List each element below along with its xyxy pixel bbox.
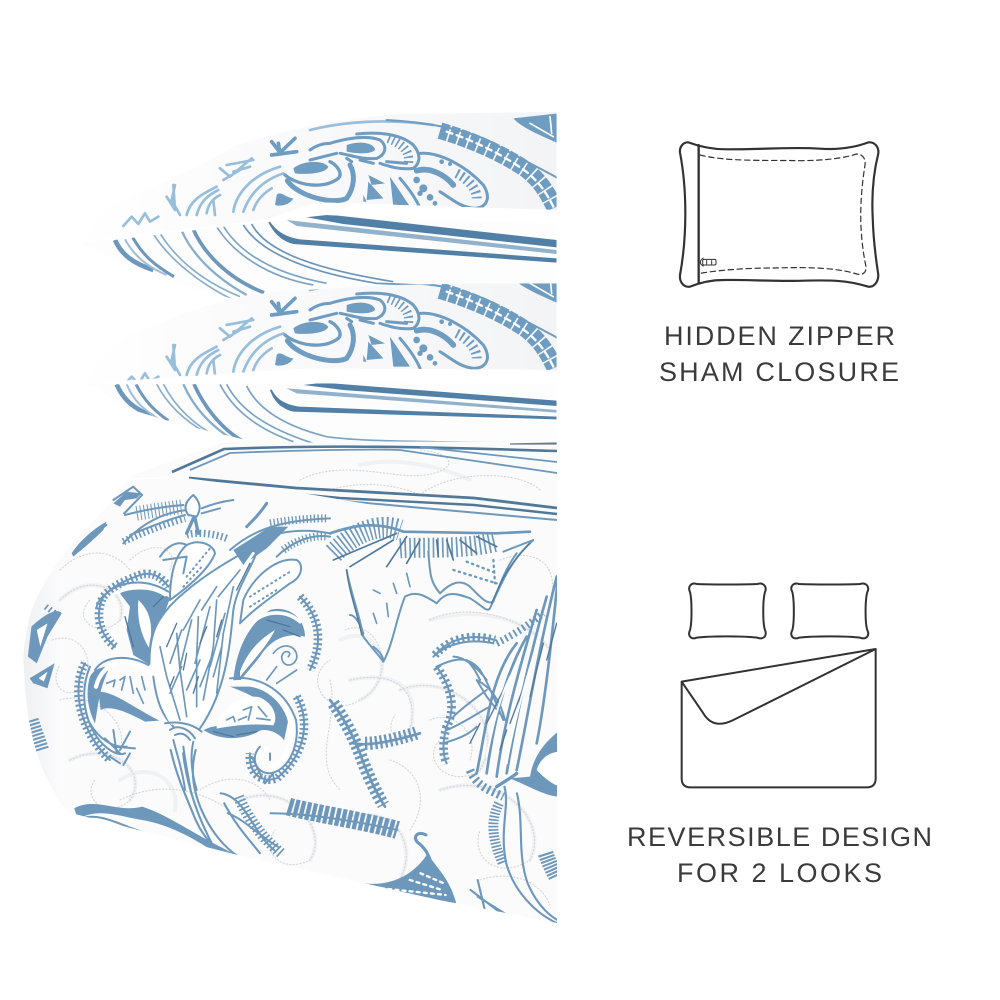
lower sham quilted top	[80, 283, 557, 383]
branch	[330, 700, 420, 807]
branch bottom	[288, 807, 397, 830]
text: reversible design for 2 looks: FOR 2 LOOKS	[677, 858, 882, 888]
photo: stacked quilted bedding	[23, 112, 560, 923]
knot and stem	[165, 723, 202, 790]
right lobes	[233, 609, 305, 685]
left edge and bottom motifs	[28, 487, 557, 923]
lower pillow sham	[114, 283, 557, 445]
text: hidden zipper sham closure: HIDDEN ZIPPER	[664, 321, 895, 351]
bottom curl	[414, 832, 432, 860]
white mask: straight right edge of photo	[557, 90, 569, 940]
scalloped edges	[99, 574, 168, 647]
top sprays	[123, 500, 233, 543]
comforter body with paisley print	[23, 478, 560, 923]
stem	[171, 750, 242, 860]
lower sham flange and striped side	[80, 368, 557, 445]
comforter fold with stripes	[128, 436, 557, 530]
icon detail: comforter with folded corner	[682, 649, 876, 787]
icon detail: zipper pull	[700, 258, 716, 266]
upper sham quilted top	[78, 112, 557, 242]
text: hidden zipper sham closure: SHAM CLOSURE	[659, 357, 899, 387]
quilting stitches	[52, 548, 553, 905]
main paisley flower	[72, 492, 330, 790]
icon detail: right pillow	[791, 584, 868, 638]
central feathered bud	[150, 615, 164, 662]
upper pillow sham	[77, 112, 558, 299]
lower-right flower	[435, 637, 495, 655]
text: reversible design for 2 looks: REVERSIBLE DESIGN	[627, 822, 932, 852]
icon: two pillows and reversible comforter	[682, 584, 876, 787]
upper-left lobe	[120, 589, 170, 665]
lower-left lobe	[88, 667, 110, 723]
icon: pillow sham with hidden zipper	[680, 142, 878, 287]
top-right flower petals	[347, 540, 533, 662]
text: hidden zipper sham closure	[659, 321, 899, 387]
text: reversible design for 2 looks	[627, 822, 932, 888]
icon detail: left pillow	[689, 584, 766, 638]
lower-right stem	[504, 787, 557, 923]
upper-right flower and lower-right flower	[330, 525, 560, 807]
upper sham flange and striped side	[80, 215, 557, 299]
lower-right lobe	[203, 687, 288, 741]
